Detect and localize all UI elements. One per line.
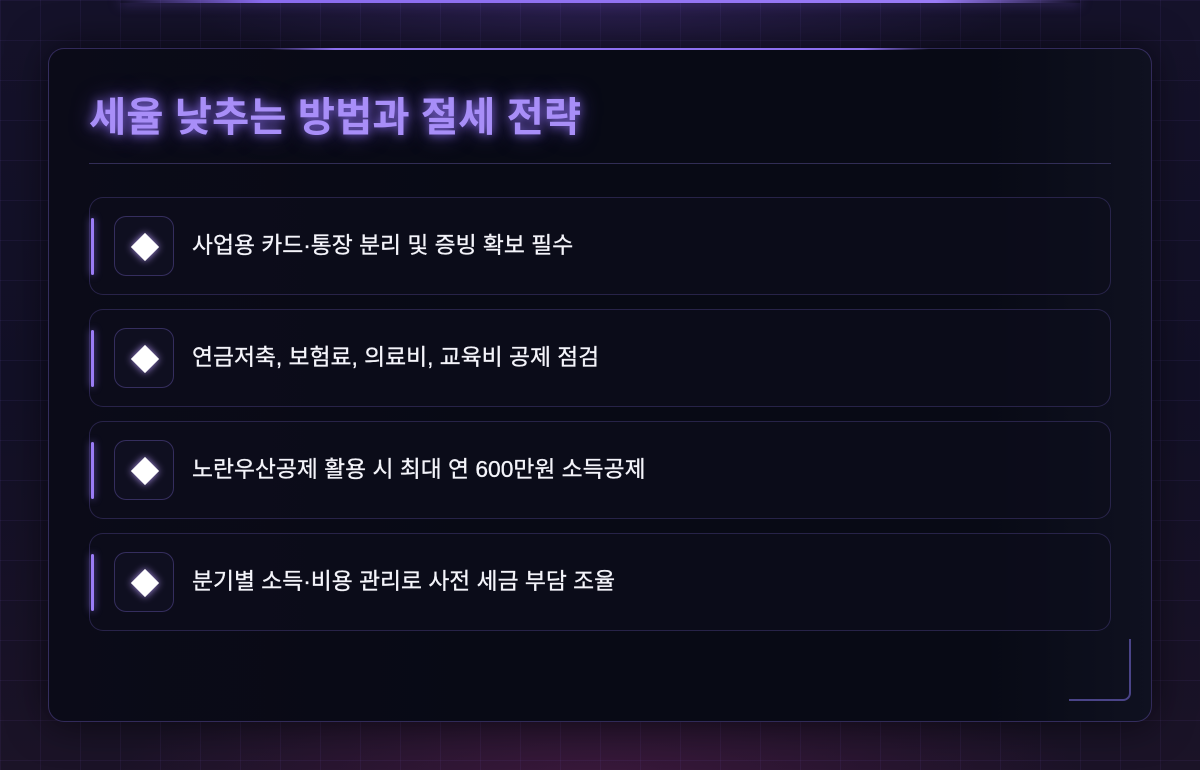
item 4 [89, 533, 1111, 631]
icon: diamond [114, 552, 174, 612]
corner bracket [1069, 639, 1131, 701]
icon: diamond [114, 440, 174, 500]
text: item 2: 연금저축, 보험료, 의료비, 교육비 공제 점검 [192, 344, 599, 370]
text: item 3: 노란우산공제 활용 시 최대 연 600만원 소득공제 [192, 456, 646, 482]
item 1 [89, 197, 1111, 295]
title: 세율 낮추는 방법과 절세 전략 [89, 94, 581, 140]
top glow line [120, 0, 1080, 3]
text: item 4: 분기별 소득·비용 관리로 사전 세금 부담 조율 [192, 568, 615, 594]
icon: diamond [114, 216, 174, 276]
icon: diamond [114, 328, 174, 388]
item 2 [89, 309, 1111, 407]
text: item 1: 사업용 카드·통장 분리 및 증빙 확보 필수 [192, 232, 573, 258]
item 3 [89, 421, 1111, 519]
